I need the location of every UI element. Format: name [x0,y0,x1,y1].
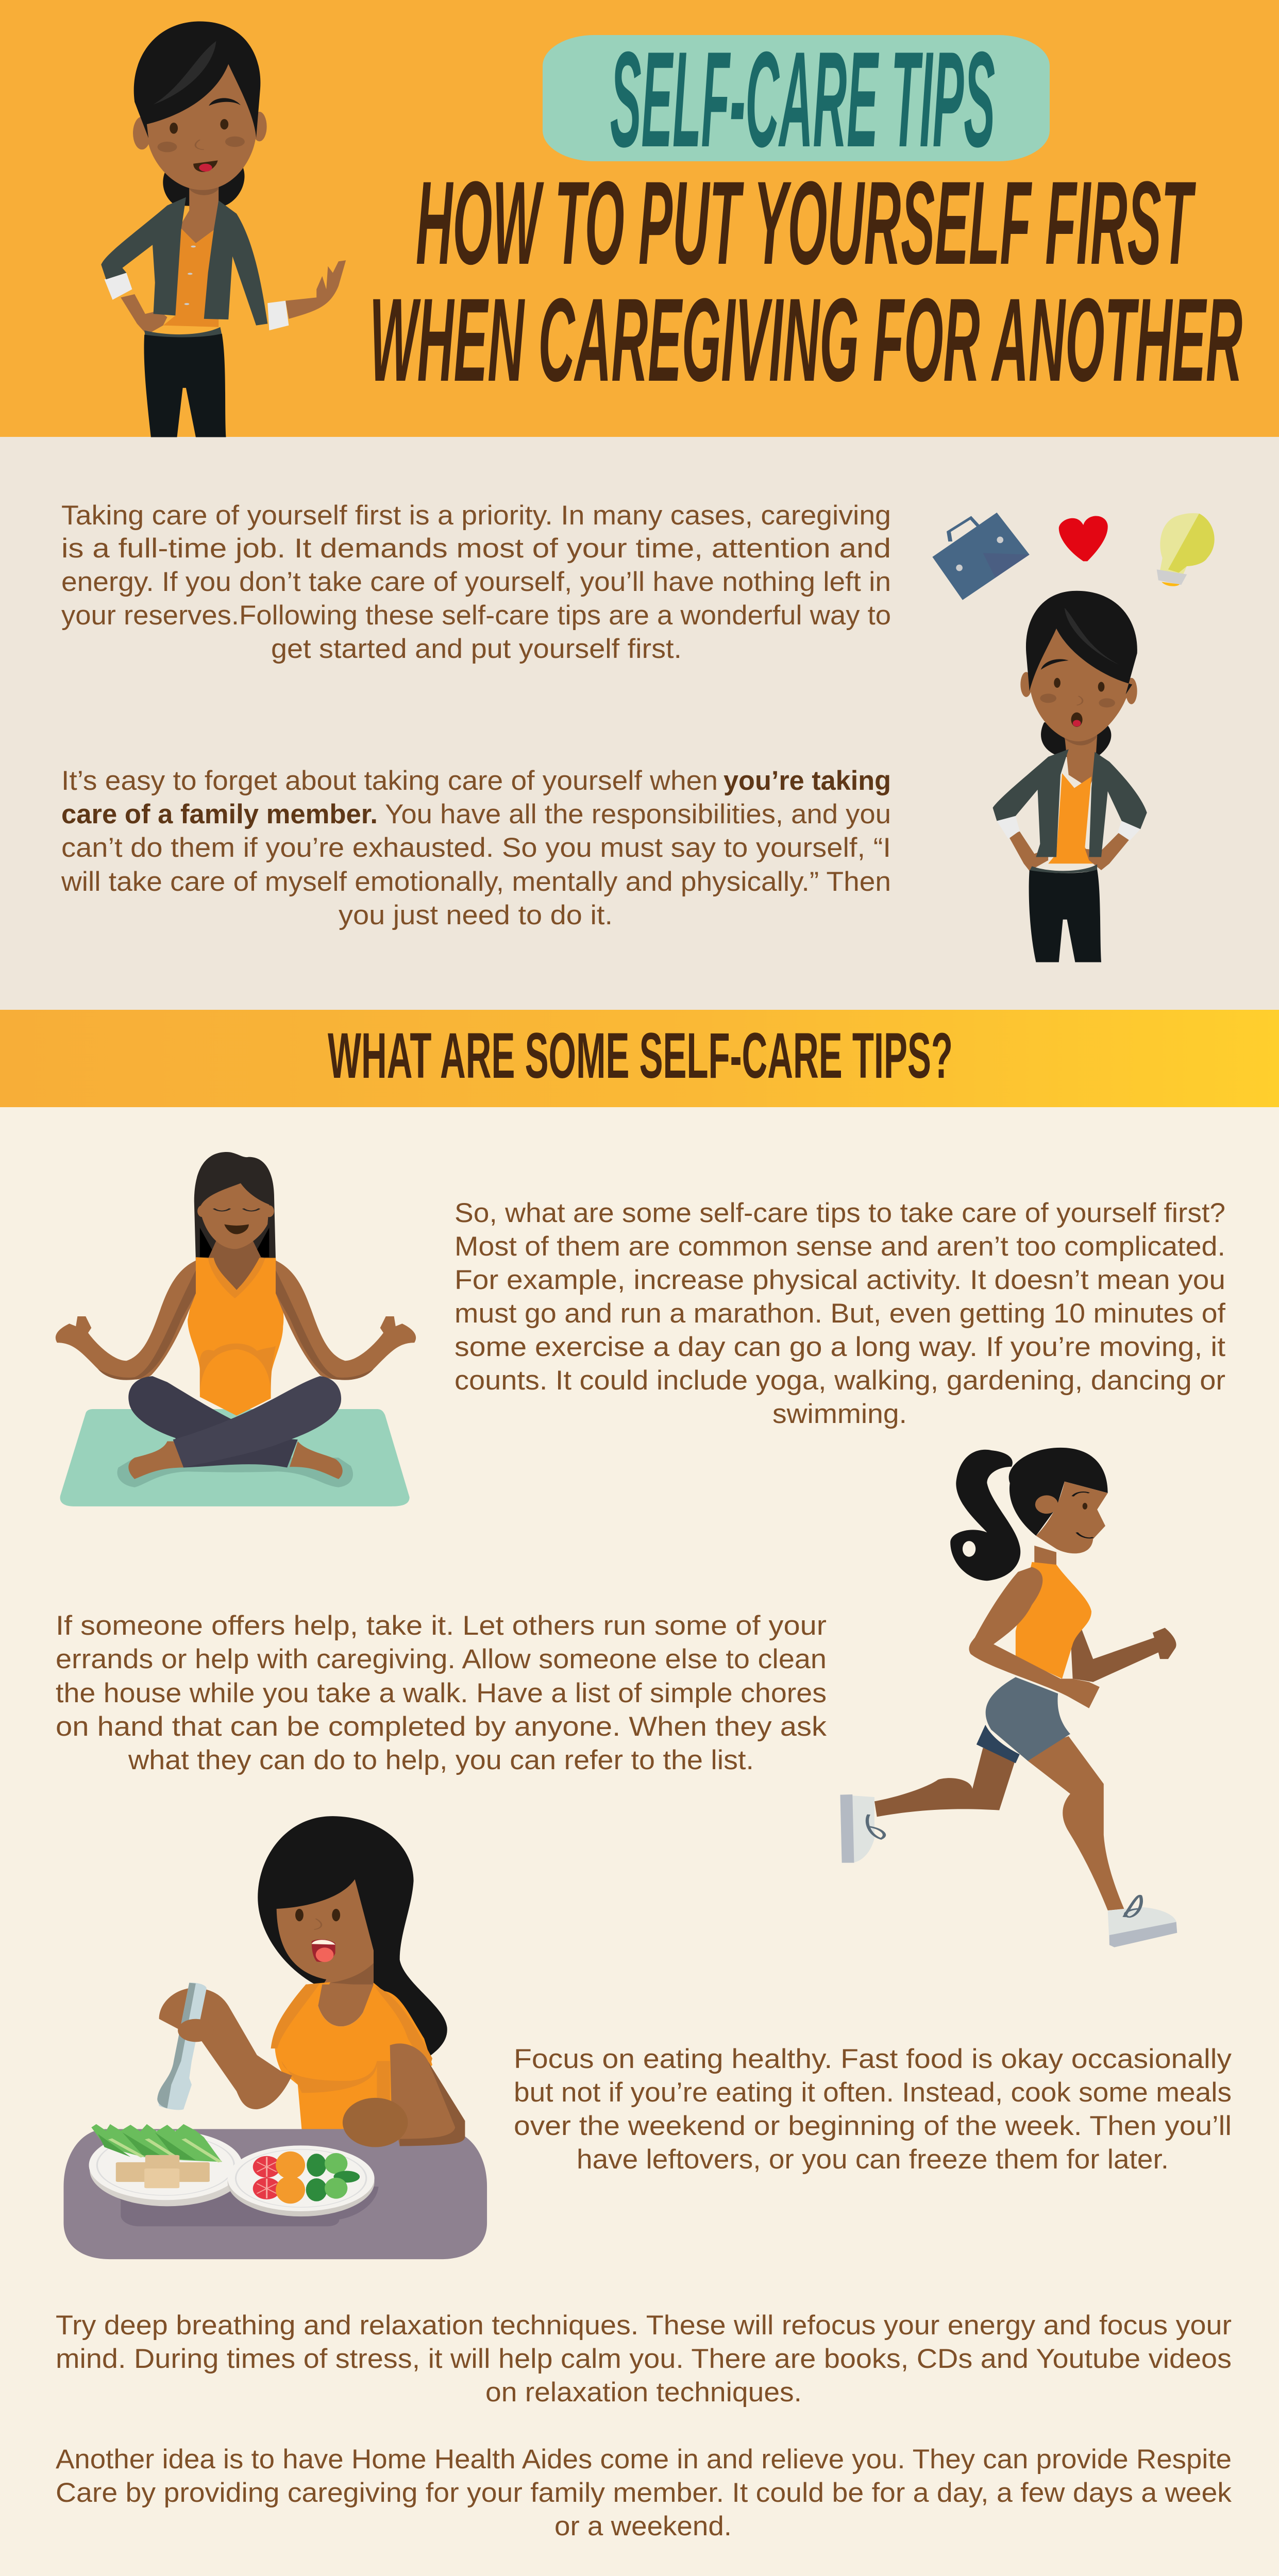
text block: accept help tip: what they can do to help, you can refer to the list. [128,1745,754,1775]
text block: intro paragraph 1: is a full-time job. It demands most of your time, attention and [61,533,891,564]
text block: eat healthy tip [514,2044,1232,2175]
panel: tips background [0,1107,1279,2576]
text block: exercise tip: counts. It could include yoga, walking, gardening, dancing or [455,1365,1225,1396]
text block: relaxation tip: Try deep breathing and relaxation techniques. These will refocus your energy and focus your [56,2310,1232,2341]
text block: exercise tip: some exercise a day can go a long way. If you’re moving, it [455,1332,1225,1362]
text block: intro paragraph 2: can’t do them if you’re exhausted. So you must say to yourself, “I [61,833,891,863]
panel: intro background [0,437,1279,1010]
illustration: surprised woman, hands on hips [993,591,1147,962]
text block: relaxation tip [56,2310,1232,2408]
text block: relaxation tip: mind. During times of stress, it will help calm you. There are books, CDs and Youtube videos [56,2344,1232,2374]
text block: intro paragraph 2 [61,766,891,930]
text block: exercise tip: Most of them are common sense and aren’t too complicated. [455,1231,1225,1262]
text block: exercise tip: swimming. [772,1399,907,1429]
text block: intro paragraph 2: you’re taking [723,766,891,796]
text block: eat healthy tip: over the weekend or beginning of the week. Then you’ll [514,2111,1232,2141]
text block: intro paragraph 2: It’s easy to forget about taking care of yourself when [61,766,718,796]
text block: intro paragraph 2: will take care of myself emotionally, mentally and physically.” Then [61,867,891,897]
text block: intro paragraph 2: care of a family member. [61,799,378,829]
text block: accept help tip: If someone offers help, take it. Let others run some of your [56,1611,827,1641]
text block: accept help tip: on hand that can be completed by anyone. When they ask [56,1711,827,1742]
text block: exercise tip: For example, increase physical activity. It doesn’t mean you [455,1265,1225,1295]
text block: relaxation tip: on relaxation techniques. [485,2377,802,2408]
text block: intro paragraph 1: energy. If you don’t take care of yourself, you’ll have nothing left in [61,567,891,597]
text block: exercise tip [455,1198,1225,1429]
text block: intro paragraph 1: Taking care of yourself first is a priority. In many cases, caregiving [61,500,891,531]
text block: intro paragraph 1 [61,500,891,664]
title [369,157,1242,406]
text block: accept help tip: the house while you take a walk. Have a list of simple chores [56,1678,827,1708]
text block: intro paragraph 2: You have all the responsibilities, and you [385,799,891,829]
illustration: briefcase, heart and light bulb icons [932,513,1215,600]
text block: exercise tip: So, what are some self-care tips to take care of yourself first? [455,1198,1225,1228]
text block: home health aides tip: or a weekend. [554,2511,732,2541]
text block: intro paragraph 1: get started and put yourself first. [271,634,682,664]
text block: eat healthy tip: have leftovers, or you can freeze them for later. [577,2144,1169,2175]
text block: home health aides tip [56,2444,1232,2541]
text block: home health aides tip: Care by providing caregiving for your family member. It could be for a day, a few days a week [56,2478,1232,2508]
text block: accept help tip [56,1611,827,1775]
illustration: woman meditating on mat [56,1152,416,1506]
section band: what are some self-care tips [0,1010,1279,1107]
text block: eat healthy tip: but not if you’re eating it often. Instead, cook some meals [514,2077,1232,2108]
text block: intro paragraph 1: your reserves.Following these self-care tips are a wonderful way to [61,600,891,631]
text block: eat healthy tip: Focus on eating healthy. Fast food is okay occasionally [514,2044,1232,2074]
illustration: woman eating healthy meal [63,1816,487,2259]
text block: intro paragraph 2: you just need to do it. [339,900,613,930]
panel: header background [0,0,1279,437]
text block: exercise tip: must go and run a marathon. But, even getting 10 minutes of [455,1298,1225,1329]
text block: home health aides tip: Another idea is to have Home Health Aides come in and relieve you. They can provide Respite [56,2444,1232,2475]
illustration: woman running [840,1448,1177,1947]
badge: self-care tips [543,23,1050,175]
text block: accept help tip: errands or help with caregiving. Allow someone else to clean [56,1644,827,1674]
illustration: waving woman in header [101,21,346,437]
